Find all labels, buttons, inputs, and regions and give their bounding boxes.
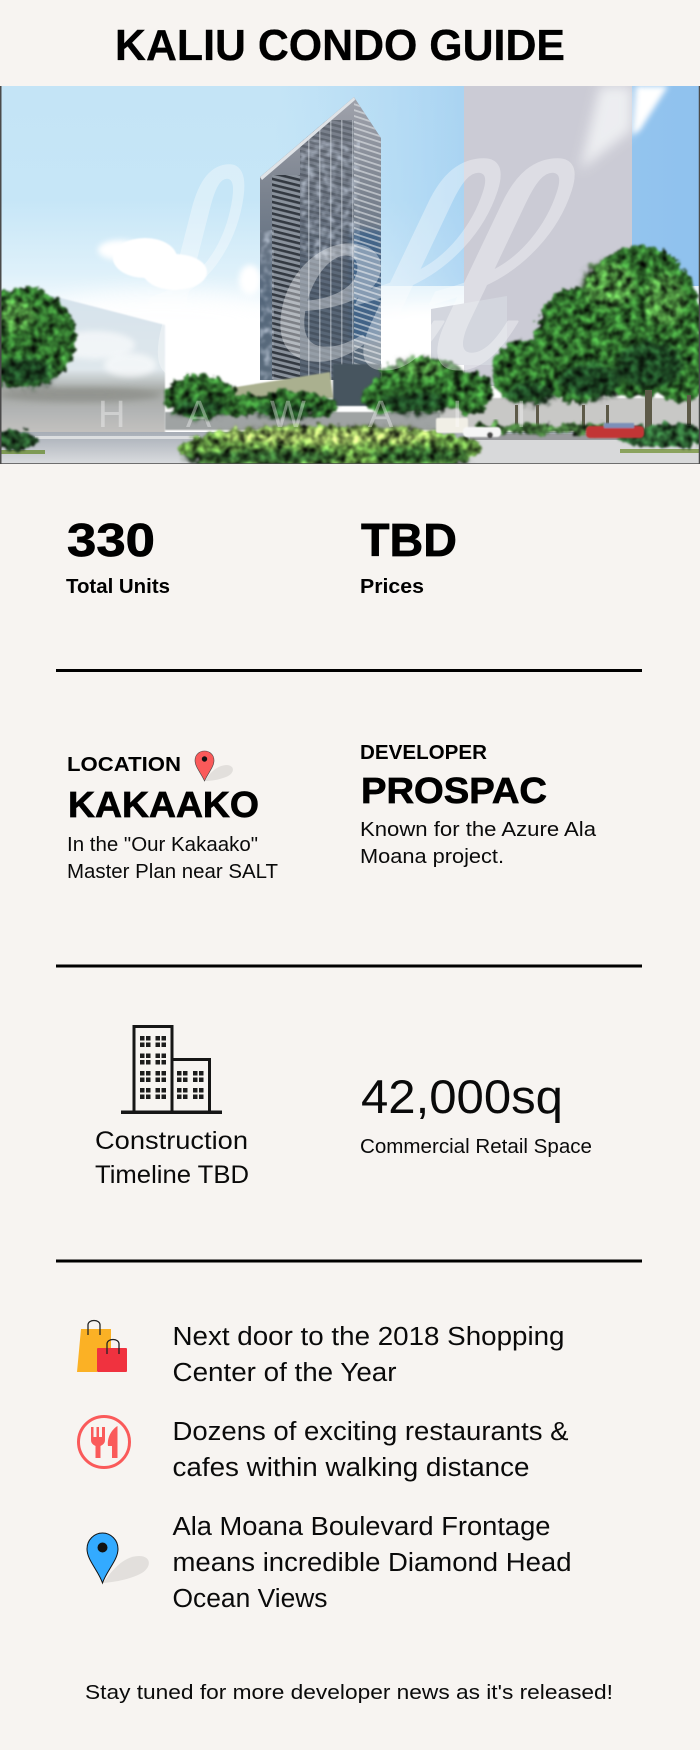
panel: developer: PROSPAC [361, 770, 547, 811]
watermark: e [268, 144, 393, 410]
icon: blue map pin [87, 1533, 149, 1583]
stat: total units: 330 [67, 514, 155, 566]
panel: developer: Known for the Azure Ala [360, 819, 597, 841]
hedges [0, 424, 700, 473]
icon: red map pin [195, 751, 233, 781]
feature: shopping center: Center of the Year [172, 1359, 397, 1387]
feature: shopping center [77, 1320, 564, 1387]
panel: commercial retail space: Commercial Retail Space [360, 1136, 592, 1158]
panel: location [67, 751, 278, 883]
icon: shopping bags [77, 1320, 127, 1372]
icon: fork and knife [78, 1416, 130, 1468]
feature: restaurants: Dozens of exciting restaurants & [172, 1418, 568, 1446]
left glass building [0, 290, 165, 434]
panel: construction timeline: Timeline TBD [95, 1161, 249, 1189]
stat: prices: Prices [360, 576, 424, 598]
panel: location: KAKAAKO [68, 784, 259, 825]
panel: construction timeline [95, 1025, 249, 1189]
watermark: ℓ [383, 91, 606, 434]
panel: location: In the "Our Kakaako" [67, 834, 258, 856]
stat: prices [360, 514, 457, 598]
feature: ocean views [87, 1513, 572, 1613]
feature: shopping center: Next door to the 2018 Shopping [172, 1323, 564, 1351]
photo edge [0, 86, 700, 464]
panel: commercial retail space: 42,000sq [361, 1070, 563, 1123]
main tower [260, 97, 381, 380]
trunks [515, 390, 691, 430]
panel: location: LOCATION [67, 753, 181, 776]
panel: developer [360, 741, 597, 868]
tower podium [230, 364, 381, 406]
road [0, 432, 700, 464]
footer note: Stay tuned for more developer news as it's released! [85, 1681, 613, 1704]
feature: ocean views: Ala Moana Boulevard Frontage [172, 1513, 550, 1541]
stat: total units: Total Units [66, 576, 170, 598]
clouds [96, 86, 670, 346]
panel: developer: Moana project. [360, 846, 504, 868]
feature: ocean views: means incredible Diamond Head [172, 1549, 572, 1577]
hero photo: tower rendering [0, 86, 700, 473]
trees [0, 246, 700, 419]
icon: buildings [121, 1025, 222, 1114]
title: KALIU CONDO GUIDE [115, 21, 565, 70]
stat: prices: TBD [361, 514, 457, 566]
feature: ocean views: Ocean Views [172, 1585, 328, 1613]
backdrop wall and cars strip [165, 398, 700, 430]
panel: construction timeline: Construction [95, 1127, 248, 1155]
panel: commercial retail space [360, 1070, 592, 1158]
stat: total units [66, 514, 170, 598]
feature: restaurants: cafes within walking distance [172, 1454, 530, 1482]
background towers [431, 86, 632, 386]
watermark [101, 158, 574, 427]
watermark: ℓ [309, 91, 532, 434]
panel: location: Master Plan near SALT [67, 861, 278, 883]
vehicles [436, 418, 644, 438]
feature: restaurants [78, 1416, 568, 1482]
watermark: HAWAII [98, 394, 527, 436]
watermark: ℓ [126, 95, 259, 439]
panel: developer: DEVELOPER [360, 741, 487, 764]
